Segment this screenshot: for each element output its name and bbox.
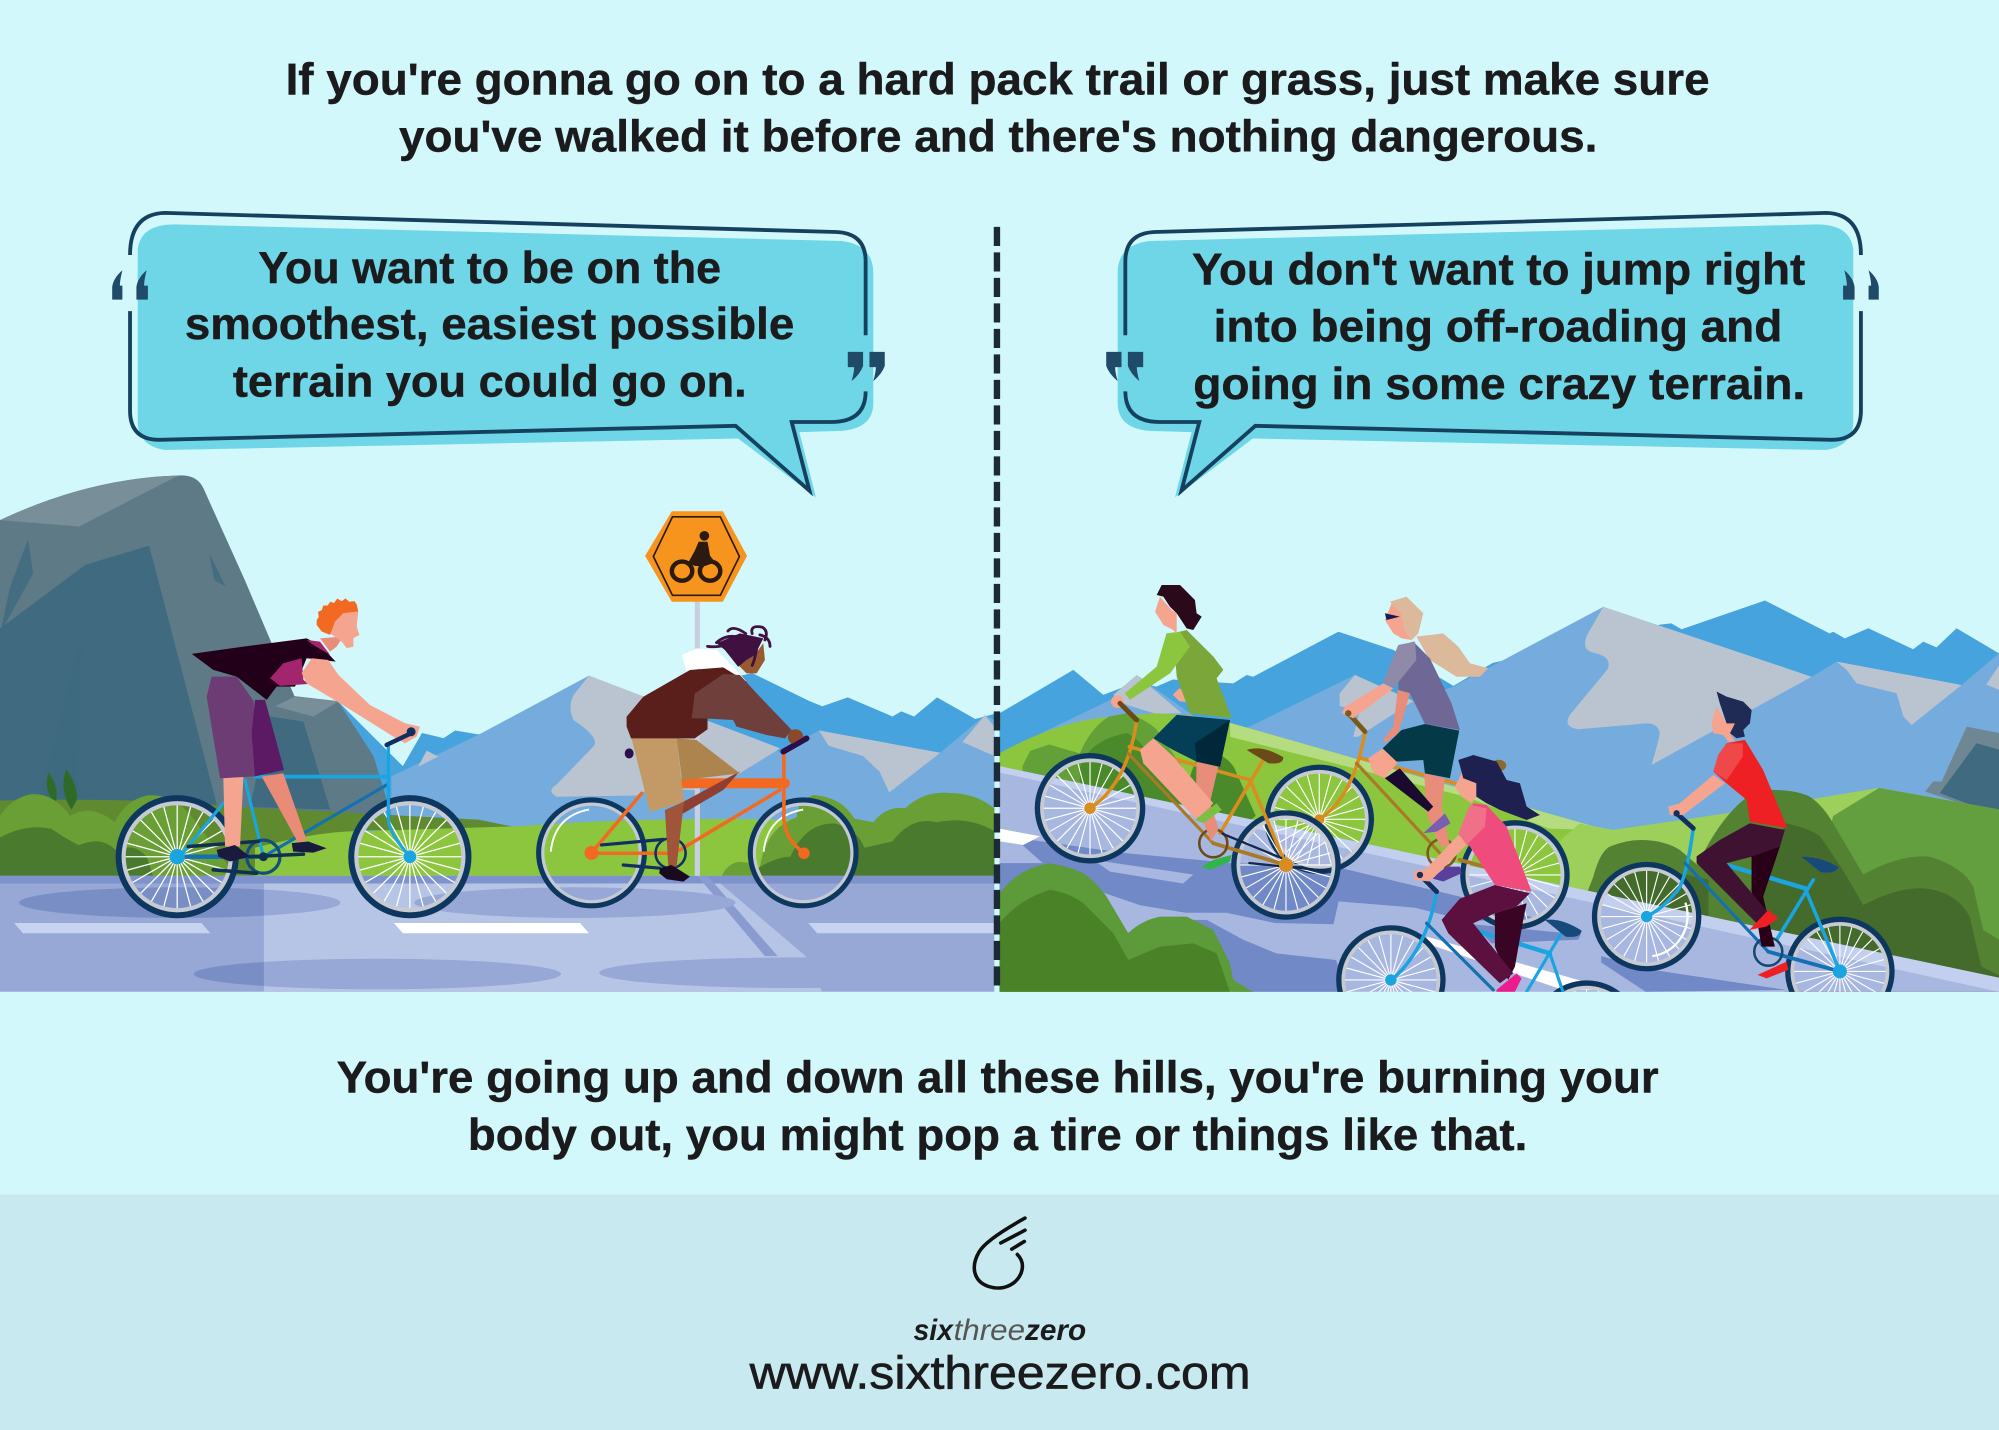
snow patches (1568, 607, 1812, 765)
rider 4: red shirt on blue bike (1595, 692, 1892, 1024)
saddle (625, 748, 634, 759)
website url: www.sixthreezero.com (749, 1346, 1251, 1398)
legs (223, 777, 243, 847)
icon: closing quote upper (1843, 270, 1879, 300)
left green hill (1000, 713, 1606, 892)
bubble outline (130, 213, 866, 491)
mid blue mountains (1000, 607, 1999, 892)
brand name: three (954, 1314, 1025, 1347)
big rock mountain (0, 475, 389, 829)
blue frame (180, 747, 410, 873)
bubble fill (138, 224, 873, 497)
lane markings (14, 923, 994, 933)
bubble fill (1118, 224, 1853, 497)
snow patches (418, 676, 994, 797)
head (1155, 597, 1177, 633)
face (1455, 773, 1477, 803)
lower dark band (1127, 920, 1346, 992)
bright green field (255, 819, 994, 876)
hood (682, 648, 747, 682)
speech bubble right (1106, 213, 1879, 497)
hair (1717, 692, 1752, 738)
hair (1458, 755, 1540, 820)
gold frame (1319, 713, 1514, 875)
bubble text: You don't want to jump right (1192, 245, 1805, 294)
road sign (645, 511, 747, 602)
shoes (217, 845, 250, 862)
bubble text: terrain you could go on. (233, 357, 747, 406)
shoes (1195, 803, 1222, 823)
icon: opening quote lower (1106, 352, 1143, 381)
highlight arc (1652, 903, 1688, 956)
bubble text: smoothest, easiest possible (185, 300, 794, 349)
front thigh (1368, 748, 1398, 778)
bubble text (1192, 245, 1805, 409)
rider 1: green shirt on gold bike (1037, 585, 1338, 917)
sleeve (1458, 805, 1487, 845)
panel: left road scene (0, 475, 994, 992)
left bushes (0, 794, 236, 876)
dark green hill (0, 800, 523, 876)
center dashed divider (994, 227, 999, 992)
rock highlight (0, 476, 178, 527)
bottom quote text (337, 1054, 1659, 1160)
road (0, 876, 994, 992)
bubble text: going in some crazy terrain. (1193, 360, 1805, 409)
title text: If you're gonna go on to a hard pack trail or grass, just make sure (286, 55, 1710, 104)
bubble text: into being off-roading and (1214, 303, 1782, 352)
front bush (1000, 863, 1253, 992)
brand name: six (913, 1314, 955, 1347)
icon: opening quote (112, 270, 148, 300)
shorts (1383, 724, 1459, 778)
blue frame (1647, 813, 1840, 971)
arm (1668, 775, 1725, 815)
thigh (664, 771, 740, 813)
bottom quote text: You're going up and down all these hills, you're burning your (337, 1054, 1659, 1103)
brand name (913, 1314, 1086, 1347)
cape torso (192, 638, 336, 700)
icon: closing quote (848, 352, 885, 381)
pale shadow tip (1093, 860, 1193, 883)
arm (302, 658, 420, 743)
back blue mountains (339, 673, 994, 841)
saddle (1801, 857, 1838, 873)
rider 2: woman on gold bike (1267, 597, 1567, 927)
back leg (1196, 762, 1219, 841)
title text: you've walked it before and there's nothing dangerous. (399, 113, 1597, 162)
sign pole (695, 599, 700, 876)
blue frame (1392, 875, 1563, 992)
bubble outline (1125, 213, 1861, 491)
saddle (1247, 748, 1283, 764)
shorts (207, 677, 256, 778)
shoe (1497, 973, 1522, 992)
sleeve (1383, 642, 1416, 688)
head (330, 612, 359, 648)
dark road band (1000, 840, 1543, 924)
pale hill strip (1230, 723, 1606, 830)
sleeve (1125, 632, 1190, 700)
black sock (1385, 768, 1433, 812)
bubble text: You want to be on the (258, 244, 721, 293)
rider 3: pink shirt woman on blue bike (1339, 755, 1639, 1087)
gold frame (1090, 703, 1326, 871)
rock crevices (2, 540, 226, 628)
speech bubble left (112, 213, 885, 497)
handlebar (387, 733, 412, 745)
hand (1111, 695, 1124, 708)
hair (317, 599, 358, 635)
icon: cyclist on sign (672, 531, 720, 581)
hand (788, 729, 803, 745)
front leg (665, 802, 684, 867)
shoes (1423, 813, 1451, 833)
wheel shadows (1472, 924, 1786, 992)
rock shadow face (0, 546, 217, 805)
plant (47, 769, 77, 810)
head (1712, 707, 1737, 742)
right bushes (1695, 790, 1999, 988)
left hill bushes (1022, 713, 1224, 822)
mid blue mountains (391, 676, 994, 841)
wheels (539, 800, 856, 906)
title text (286, 55, 1710, 162)
bottom quote text: body out, you might pop a tire or things like that. (468, 1111, 1527, 1160)
shirt (1173, 630, 1232, 718)
icon: sixthreezero wing logo (974, 1218, 1025, 1288)
back blue mountains (1000, 600, 1999, 841)
right green hill (1560, 788, 1999, 988)
shirt (1458, 803, 1532, 892)
shirt (1398, 642, 1460, 730)
ponytail (1416, 633, 1488, 677)
footer band (0, 1195, 1999, 1430)
shoes (1749, 910, 1778, 930)
shorts (677, 738, 740, 780)
shorts (1153, 715, 1230, 767)
tank top accents (270, 640, 330, 686)
arm (1413, 835, 1468, 882)
rider 2: brown jacket on orange bike (539, 627, 856, 906)
white lane stripes (1000, 829, 1613, 990)
orange frame (592, 738, 807, 868)
shoe (659, 865, 690, 882)
back hand (1173, 688, 1196, 704)
back leg (1495, 903, 1527, 980)
hair (1390, 597, 1423, 640)
back leg (1752, 847, 1780, 947)
head (1385, 603, 1412, 640)
face (738, 643, 765, 673)
jacket (627, 667, 752, 738)
bun (1491, 760, 1506, 771)
distant rock (1925, 727, 1999, 816)
front leg (1442, 885, 1530, 983)
road surface (1000, 766, 1999, 992)
panel: right hill scene (1000, 585, 1999, 1087)
back arm (1383, 687, 1410, 743)
sunglasses (1385, 613, 1400, 620)
front bush inner (1000, 890, 1230, 992)
road edge band (1000, 766, 1999, 992)
right bushes (722, 793, 994, 876)
hair (1157, 585, 1202, 630)
shirt (1713, 740, 1787, 828)
front leg (1140, 738, 1213, 820)
brand name: zero (1024, 1314, 1086, 1347)
hair (716, 633, 763, 667)
neck (320, 637, 340, 652)
road shadows (19, 887, 820, 990)
dreadlocks (708, 627, 770, 665)
rider 1: orange hair on blue bike (119, 599, 468, 915)
front arm (1342, 683, 1393, 718)
saddle (1545, 920, 1582, 937)
back leg (1424, 773, 1450, 847)
bubble text (185, 244, 794, 406)
front leg (1697, 823, 1785, 923)
sleeve (1713, 743, 1743, 780)
